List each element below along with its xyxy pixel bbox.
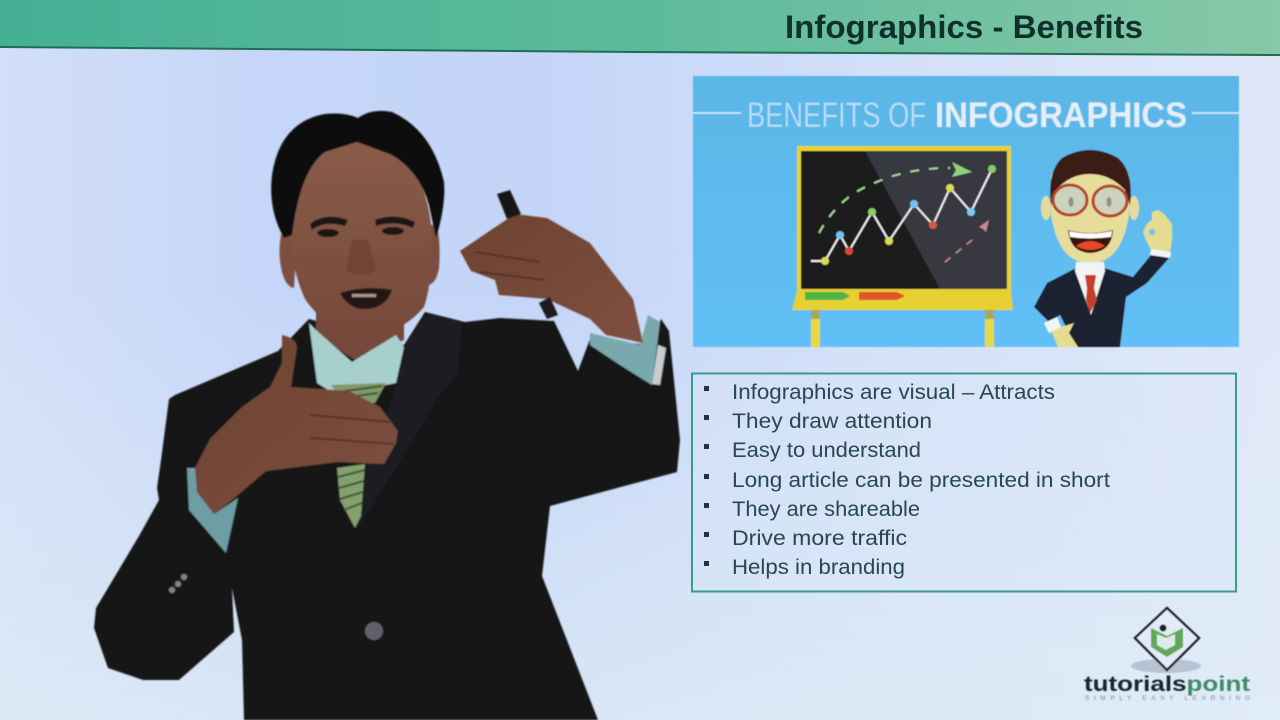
list text: Infographics are visual – Attracts (732, 381, 1055, 404)
tie stripes (338, 386, 382, 510)
banner title (693, 96, 1239, 135)
teeth (1069, 231, 1112, 238)
list text: They are shareable (732, 498, 920, 521)
board shelf (792, 292, 1013, 310)
tongue (1076, 241, 1105, 250)
left shirt cuff (187, 468, 238, 553)
face (290, 135, 432, 336)
hair (1050, 150, 1131, 205)
logo shadow (1131, 659, 1201, 673)
line chart (811, 165, 996, 265)
benefits list box (692, 374, 1236, 592)
chalkboard surface (801, 151, 1007, 289)
title: Infographics - Benefits (785, 9, 1143, 45)
shirt (1075, 262, 1105, 315)
ear right (427, 225, 440, 285)
list text: Helps in branding (732, 556, 905, 579)
left hand finger lines (310, 415, 394, 444)
list text (732, 381, 1110, 579)
red marker (859, 292, 905, 300)
left hand (195, 335, 398, 514)
list text: They draw attention (732, 410, 932, 433)
green dashed trend arrow (819, 162, 972, 233)
lower hand (1051, 323, 1078, 347)
mouth (1068, 230, 1113, 253)
clicker bottom (539, 297, 558, 319)
list text: Drive more traffic (732, 527, 907, 550)
list text: Long article can be presented in short (732, 469, 1110, 492)
right hand (460, 214, 643, 343)
eyebrows and eyes (310, 216, 415, 237)
teeth (352, 294, 376, 297)
bullets (704, 386, 709, 566)
banner title: BENEFITS OF (747, 96, 926, 135)
clicker top (497, 190, 521, 219)
jacket button (365, 622, 383, 640)
head (1051, 165, 1129, 262)
cartoon businessman (1034, 150, 1172, 347)
banner title: INFOGRAPHICS (935, 96, 1187, 135)
tagline: SIMPLY EASY LEARNING (1085, 695, 1250, 702)
sleeve buttons (169, 574, 187, 593)
lapel shading (358, 314, 462, 528)
nose shadow (346, 240, 376, 275)
list text: Easy to understand (732, 439, 921, 462)
board legs (811, 310, 994, 347)
presenter photo illustration (94, 111, 680, 720)
logo book (1151, 628, 1183, 657)
tie knot (331, 383, 386, 403)
raised hand (1143, 210, 1172, 258)
ear left (280, 231, 297, 288)
tutorialspoint logo (1084, 608, 1250, 702)
jacket (94, 312, 680, 720)
chalkboard frame (797, 146, 1011, 293)
right shirt cuff (590, 315, 660, 385)
logo reader (1157, 624, 1175, 650)
infographic panel (693, 76, 1239, 347)
header band (0, 0, 1280, 55)
ears (1041, 196, 1139, 220)
pupils (1068, 197, 1112, 207)
glasses (1053, 185, 1127, 216)
jacket (1034, 255, 1170, 347)
lower cuff (1044, 317, 1061, 333)
green marker (805, 292, 850, 300)
shirt collar (309, 323, 404, 392)
neck (316, 285, 404, 360)
right hand finger lines (475, 252, 545, 280)
hair (271, 111, 444, 238)
mouth (340, 288, 392, 309)
cuff button strip (652, 345, 666, 385)
necktie (1085, 275, 1097, 313)
logo diamond (1135, 608, 1199, 670)
tie lower (337, 464, 365, 528)
wordmark: tutorials point (1084, 673, 1250, 696)
red dashed trend arrow (945, 220, 989, 262)
